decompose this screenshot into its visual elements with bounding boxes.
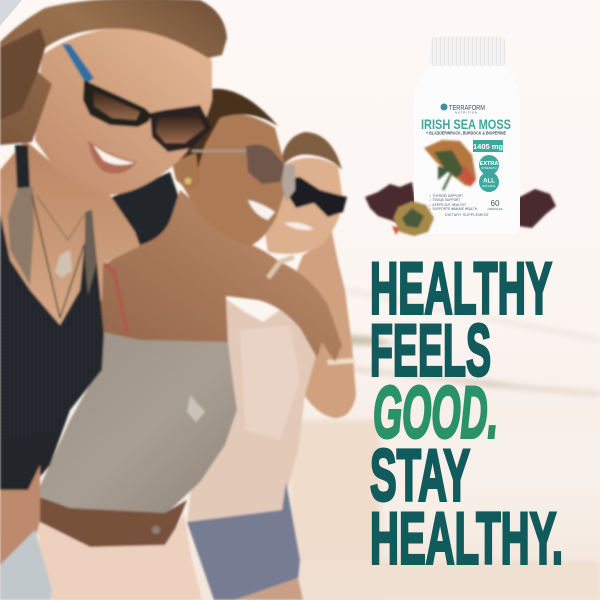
woman 3: right figure (187, 132, 356, 600)
woman 3 sunglasses (288, 177, 347, 217)
bottle body (414, 66, 520, 234)
bottle cap (429, 37, 506, 66)
extra strength badge (479, 155, 499, 175)
brand logo: TERRAFORM (449, 105, 485, 112)
brand logo (440, 104, 485, 114)
woman 1 smile (88, 140, 137, 174)
woman 1 face (35, 27, 212, 195)
benefits list: ✓ TISSUE SUPPORT (429, 198, 460, 202)
woman 2 sunglasses (192, 145, 295, 202)
seaweed in front of bottle (392, 201, 434, 236)
woman 3 arm and raised hand (285, 232, 356, 418)
woman 1 crochet top (0, 210, 104, 494)
bracelet (268, 257, 294, 278)
seaweed on label (424, 140, 476, 190)
pendant (55, 250, 72, 278)
woman 1 shoulders and chest (0, 140, 140, 340)
lace trim (8, 187, 34, 285)
denim shorts (0, 530, 52, 600)
woman 2 gray top (36, 331, 237, 515)
woman 2 smile (248, 200, 275, 220)
brand logo: NUTRITION (455, 110, 477, 114)
woman 1 lower top band (0, 430, 60, 494)
woman 3 top (187, 296, 317, 525)
extra strength badge: STRENGTH (481, 166, 497, 170)
capsule count: CAPSULES (488, 207, 503, 211)
benefits list: ✓ KEEPS GUT HEALTHY (429, 203, 467, 207)
all natural badge: ALL (483, 178, 495, 184)
capsule count: 60 (491, 199, 500, 208)
benefits list: ✓ SUPPORTS IMMUNE HEALTH (429, 207, 478, 211)
woman 2 midriff (34, 495, 187, 547)
line: STAY: STAY (370, 436, 470, 516)
dosage badge: 1405 mg (473, 142, 503, 151)
headline: healthy feels good, stay healthy (370, 248, 563, 580)
bikini strap (102, 262, 127, 332)
woman 2 hair (172, 89, 278, 175)
woman 2 face (176, 113, 286, 246)
subtitle: + BLADDERWRACK, BURDOCK & BIOPERINE (426, 130, 506, 136)
woman 2: center figure (34, 89, 342, 600)
necklaces (32, 195, 84, 318)
woman 3 shorts (187, 482, 300, 600)
line: FEELS: FEELS (370, 310, 491, 392)
dark gap between figures (110, 172, 185, 246)
benefits list: ✓ THYROID SUPPORT (429, 194, 463, 198)
woman 1 sunglasses (62, 44, 212, 152)
woman 1 hair (0, 0, 227, 145)
woman 3 smile (284, 222, 314, 230)
woman 3 hair (280, 132, 342, 170)
dietary supplement line: DIETARY SUPPLEMENT (445, 213, 490, 217)
woman 2 pink shorts (36, 515, 202, 600)
seaweed behind bottle (365, 182, 556, 228)
product: supplement bottle (365, 37, 556, 236)
woman 2 ear and earring (172, 153, 200, 190)
woman 1: left figure (0, 0, 227, 600)
woman 3 face (262, 158, 343, 254)
all natural badge: NATURAL (482, 184, 496, 188)
extra strength badge: EXTRA (480, 161, 498, 167)
capsule count (488, 199, 503, 211)
woman 1 black strap (15, 145, 30, 188)
woman 2 neck, chest and arm (100, 190, 342, 362)
woman 1 midriff (0, 465, 40, 565)
photo: three women laughing (0, 0, 356, 600)
all natural badge (479, 172, 499, 192)
benefits list (429, 194, 478, 211)
product name: IRISH SEA MOSS (421, 116, 511, 132)
